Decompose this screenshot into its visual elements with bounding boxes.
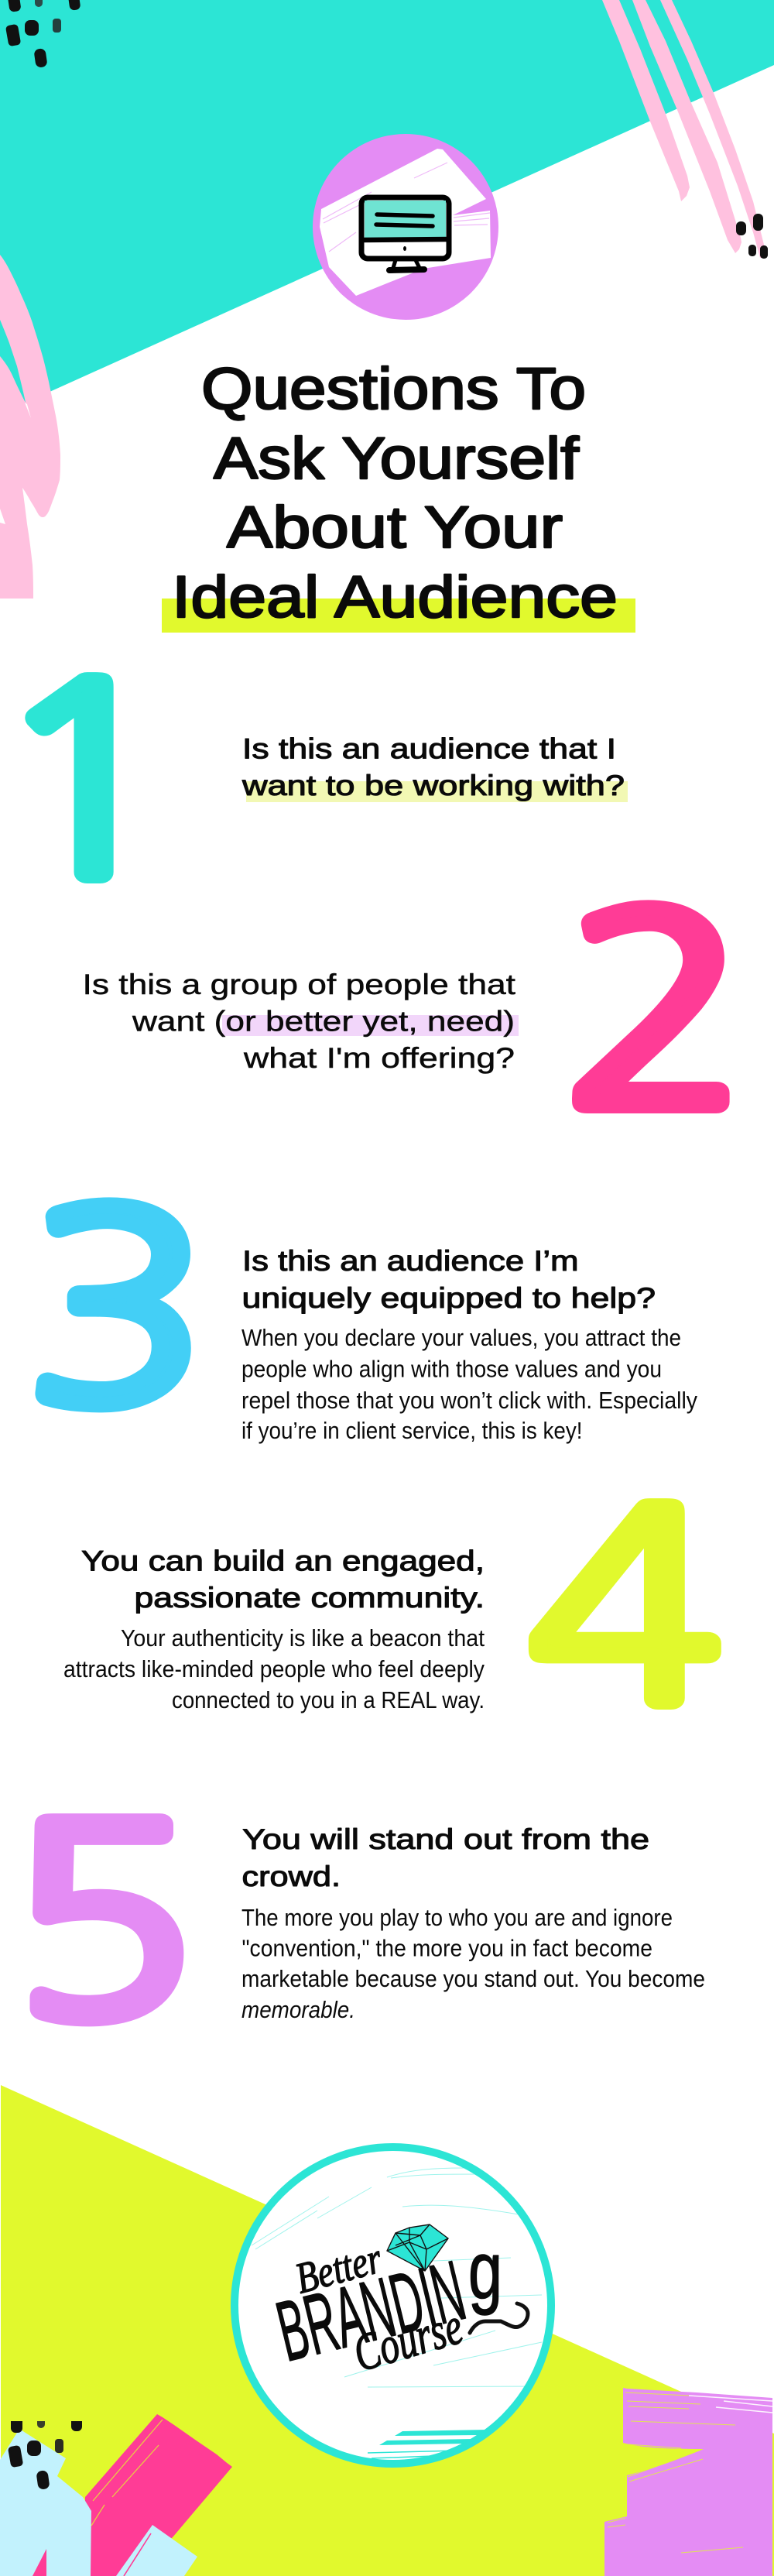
pink brush stroke: left	[0, 255, 60, 599]
question 3 text: if you’re in client service, this is key!	[241, 1417, 582, 1444]
statement 4 text: passionate community.	[135, 1582, 485, 1614]
question 3 text	[241, 1245, 697, 1444]
statement 5 text	[241, 1823, 705, 2023]
statement 5 text: memorable.	[241, 1996, 355, 2023]
teal background shape	[0, 0, 774, 414]
statement 4 text: You can build an engaged,	[81, 1545, 485, 1576]
icon: diamond	[387, 2224, 448, 2271]
icon: monitor in purple circle	[313, 134, 498, 320]
question 1 text	[241, 732, 628, 802]
question 2 text: want (or better yet, need)	[132, 1005, 515, 1038]
number 5: 5	[8, 1792, 197, 2054]
yellow background shape	[1, 2085, 774, 2576]
black paint dots: bottom left	[8, 2421, 82, 2489]
question 3 text: uniquely equipped to help?	[241, 1282, 656, 1314]
logo badge: Better Branding Course: g	[468, 2225, 502, 2316]
pink brush stroke: bottom left	[85, 2414, 232, 2576]
logo badge: Better Branding Course: BRANDIN	[269, 2243, 474, 2379]
logo badge: Better Branding Course: Better	[290, 2235, 387, 2303]
question 3 text: repel those that you won’t click with. Especially	[241, 1387, 697, 1414]
statement 5 text: The more you play to who you are and ignore	[241, 1904, 673, 1931]
title: Ask Yourself	[214, 426, 580, 492]
question 1 text: want to be working with?	[241, 770, 625, 801]
title	[162, 356, 635, 633]
title: Ideal Audience	[172, 564, 618, 630]
question 3 text: Is this an audience I’m	[242, 1245, 579, 1277]
question 2 text: what I'm offering?	[243, 1042, 515, 1074]
statement 4 text: Your authenticity is like a beacon that	[121, 1624, 485, 1652]
question 1 text: Is this an audience that I	[242, 732, 616, 765]
question 3 text: people who align with those values and you	[241, 1355, 662, 1383]
number 3: 3	[25, 1178, 209, 1440]
black paint dots: top left	[5, 0, 80, 68]
logo badge: Better Branding Course	[235, 2147, 551, 2464]
number 2: 2	[562, 881, 749, 1143]
pale blue brush strokes: bottom left	[0, 2429, 197, 2576]
title: About Your	[227, 495, 563, 561]
black paint dots: top right	[736, 214, 768, 259]
purple brush stroke: bottom right	[604, 2388, 772, 2576]
question 3 text: When you declare your values, you attract the	[241, 1324, 681, 1351]
statement 4 text: attracts like-minded people who feel deeply	[63, 1655, 485, 1682]
statement 5 text: "convention," the more you in fact become	[241, 1934, 652, 1962]
number 4: 4	[527, 1477, 722, 1739]
statement 5 text: crowd.	[241, 1861, 341, 1892]
statement 4 text: connected to you in a REAL way.	[172, 1686, 485, 1713]
statement 4 text	[63, 1545, 485, 1713]
statement 5 text: marketable because you stand out. You become	[241, 1965, 705, 1992]
question 2 text	[82, 969, 519, 1074]
statement 5 text: You will stand out from the	[242, 1823, 649, 1855]
pink brush stripes: top right	[602, 0, 766, 258]
question 2 text: Is this a group of people that	[82, 969, 516, 1000]
logo badge: Better Branding Course: Course	[347, 2296, 469, 2382]
title: Questions To	[201, 356, 586, 422]
